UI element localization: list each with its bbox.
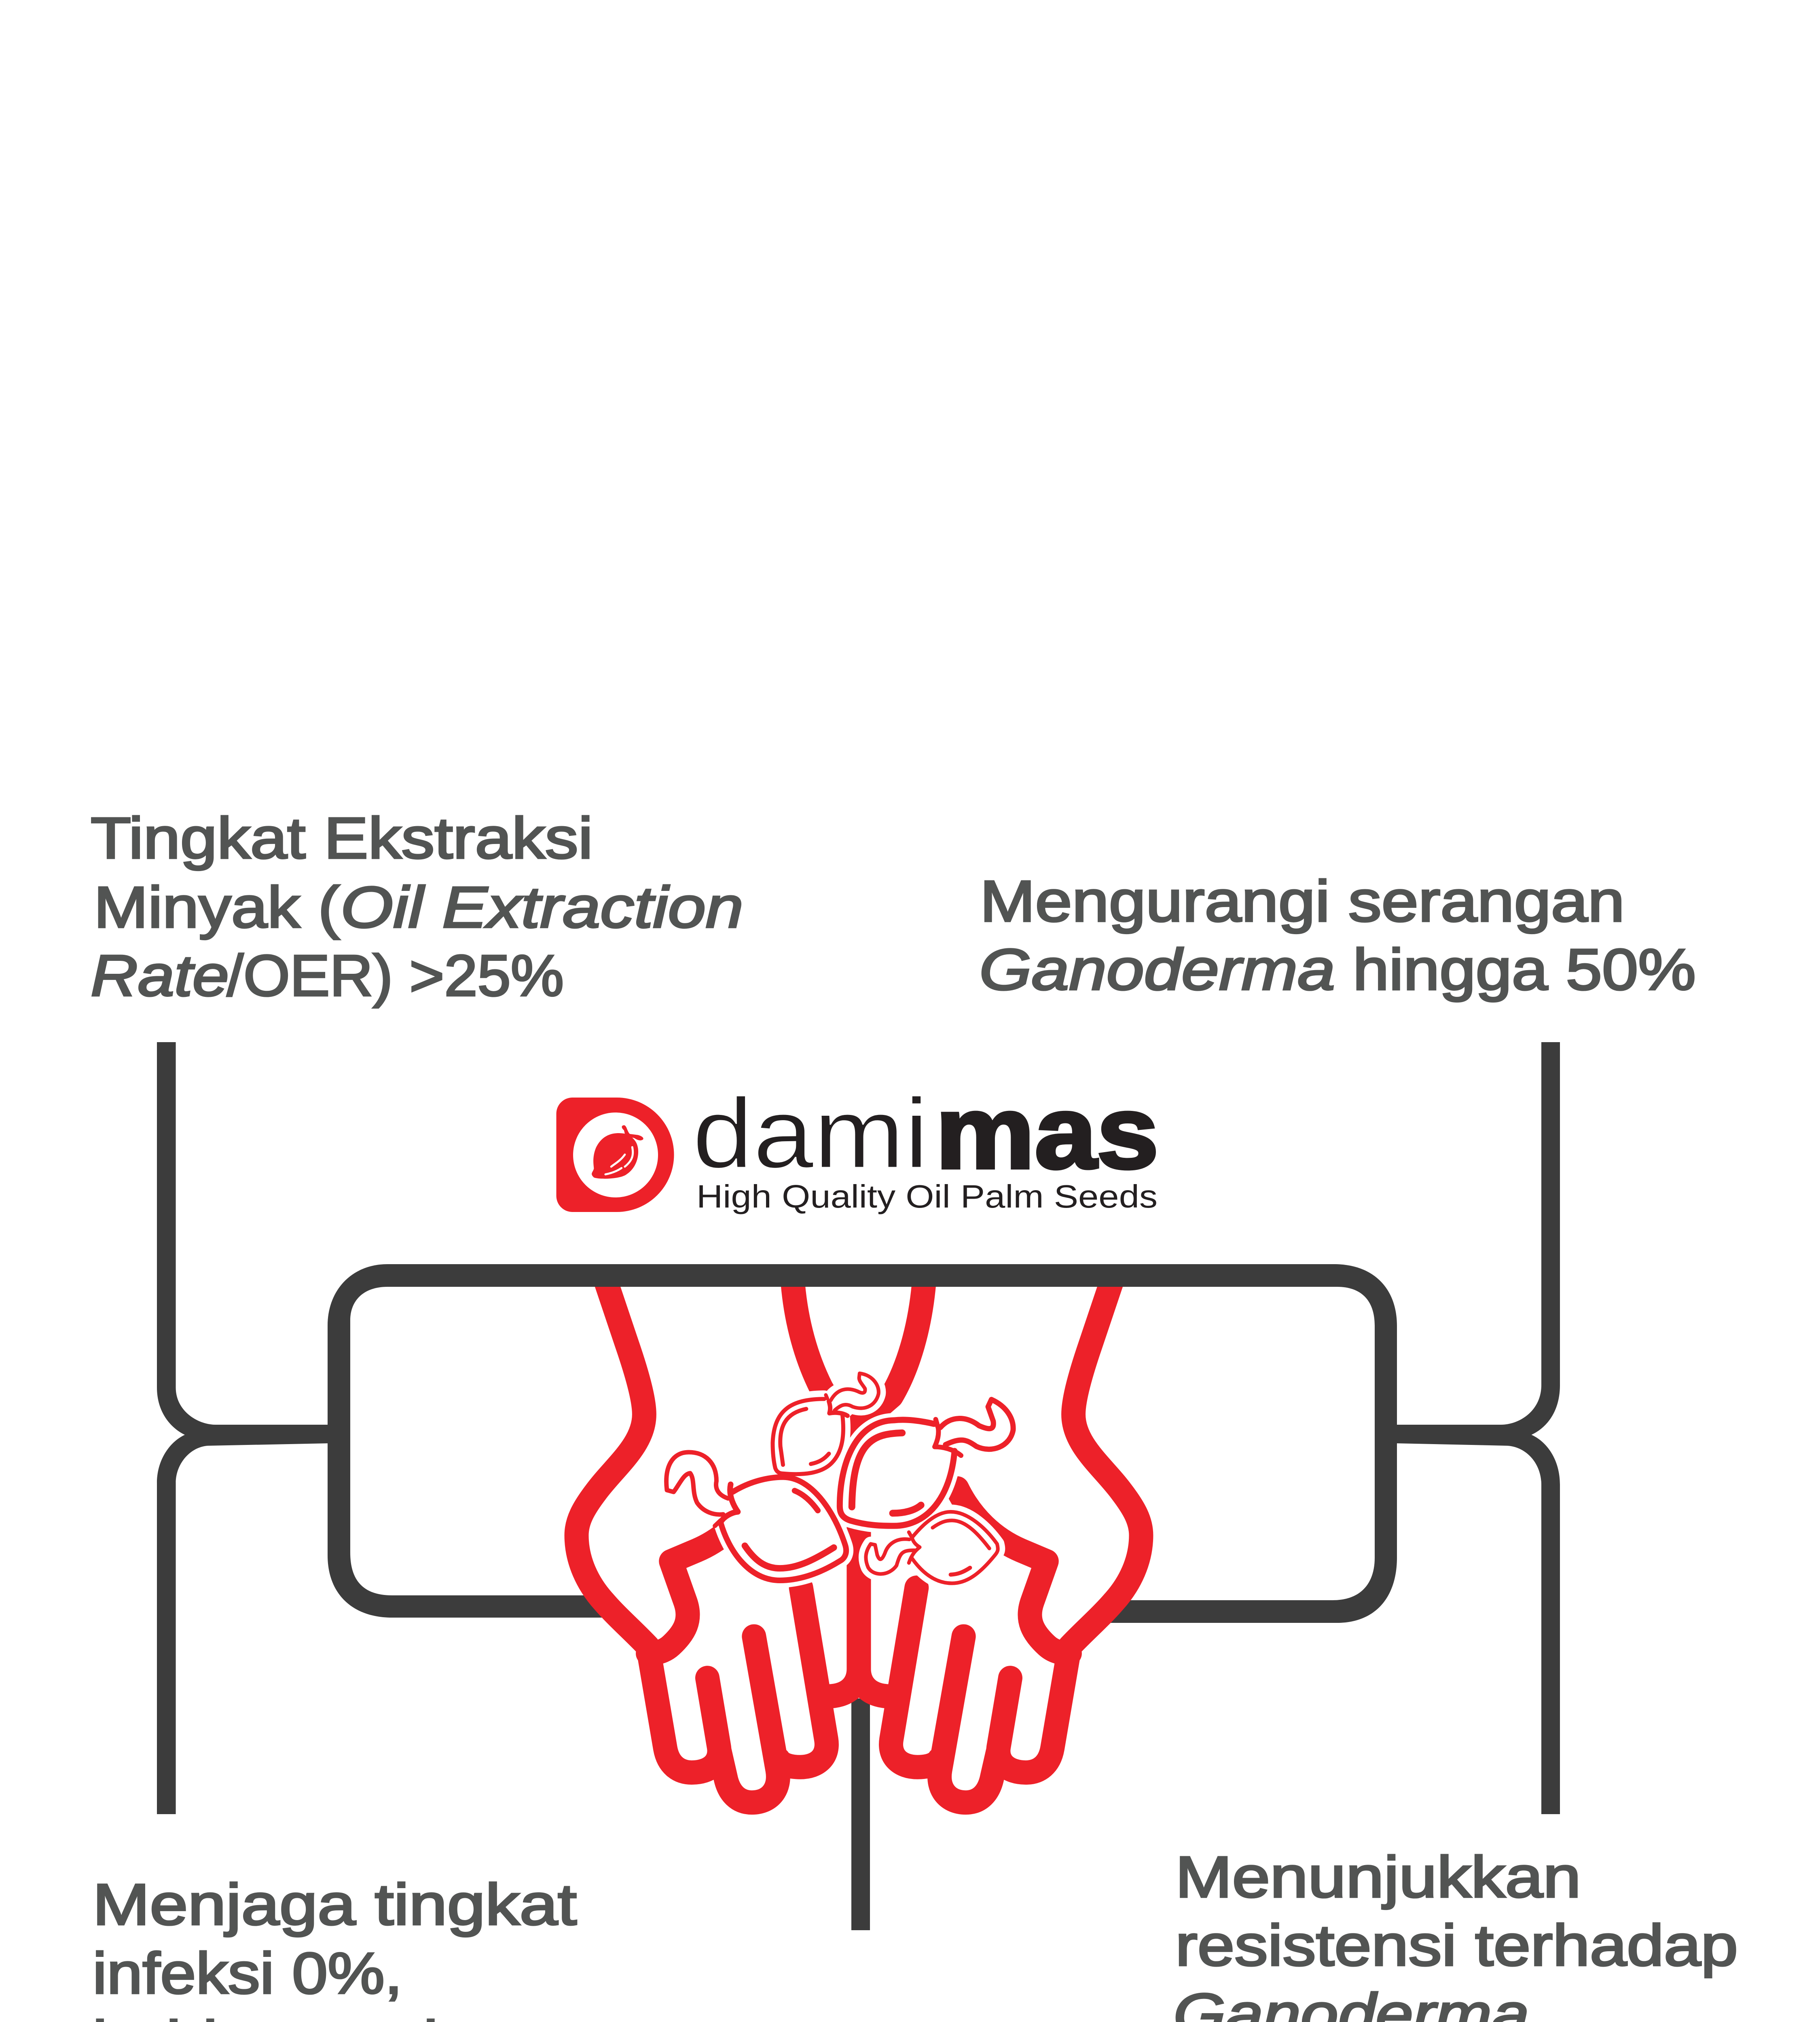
left connector bracket (157, 1042, 328, 1814)
text: ganoderma resistance: Menunjukkan (1175, 1844, 1581, 1910)
text: infection rate: Menjaga tingkat (93, 1872, 577, 1937)
text: oil extraction rate: Tingkat Ekstraksi (91, 806, 593, 871)
icon: cupped hands holding palm seeds (566, 1264, 1254, 1802)
text: ganoderma resistance: resistensi terhadap (1175, 1913, 1738, 1978)
text: ganoderma reduction: hingga 50% (1353, 937, 1696, 1002)
logo icon (556, 1098, 674, 1212)
text: oil extraction rate: Oil Extraction (341, 875, 743, 940)
text: ganoderma reduction: Mengurangi serangan (980, 869, 1625, 934)
text: infection rate: infeksi 0%, (93, 1941, 402, 2006)
right connector bracket (1396, 1042, 1560, 1814)
logo tagline: High Quality Oil Palm Seeds (696, 1178, 1158, 1214)
seed top left (772, 1373, 878, 1474)
text: oil extraction rate: /OER) >25% (227, 943, 564, 1008)
right hand (852, 1282, 1141, 1802)
frame top edge over the arms (566, 1264, 1254, 1287)
text: ganoderma resistance (1171, 1844, 1745, 2022)
logo: damimas (556, 1075, 1159, 1214)
seed lower right (866, 1512, 998, 1583)
text: oil extraction rate: Minyak ( (94, 875, 340, 940)
central frame (328, 1264, 1397, 1623)
centre stem line (851, 1698, 870, 1930)
logo wordmark: dami (692, 1078, 929, 1189)
seed halos (667, 1373, 1013, 1583)
text: ganoderma reduction (979, 869, 1696, 1002)
text: oil extraction rate (91, 806, 743, 1008)
logo wordmark (692, 1075, 1159, 1190)
text: oil extraction rate: Rate (91, 943, 229, 1008)
text: ganoderma reduction: Ganoderma (979, 937, 1335, 1002)
seed centre (840, 1400, 1013, 1526)
logo wordmark: mas (935, 1075, 1159, 1190)
seed lower left (667, 1452, 846, 1580)
text: infection rate (89, 1872, 597, 2022)
palm interior mask over frame (588, 1589, 1130, 1629)
seeds (667, 1373, 1013, 1583)
left hand (577, 1282, 859, 1802)
